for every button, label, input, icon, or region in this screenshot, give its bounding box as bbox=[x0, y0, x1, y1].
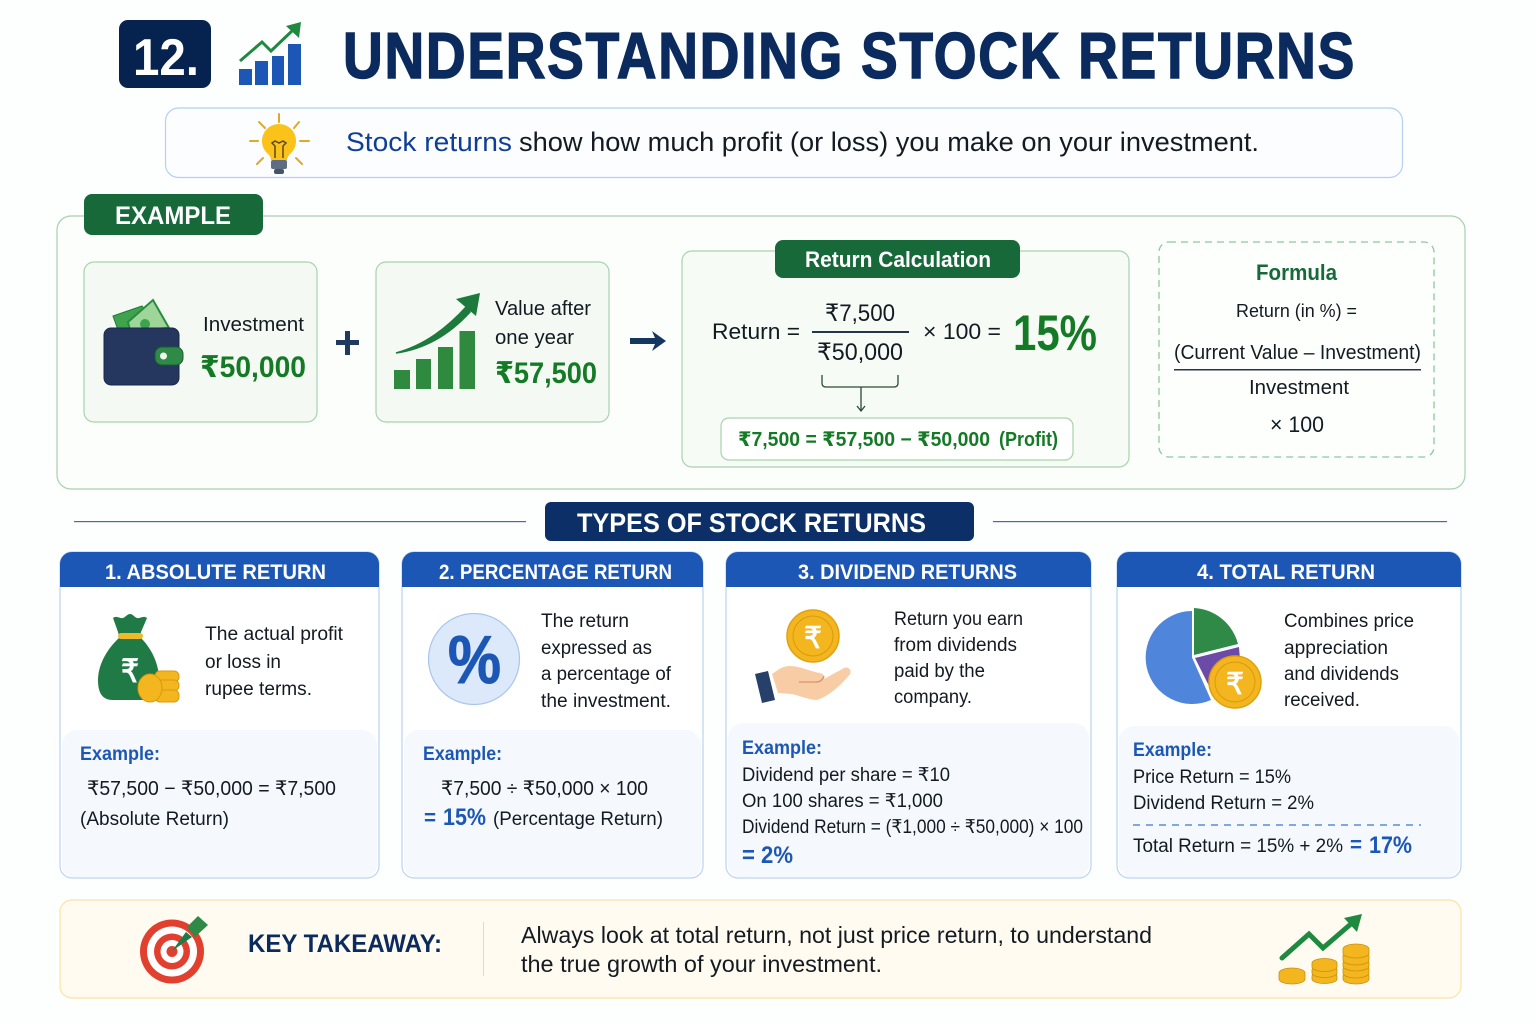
card header: 1. ABSOLUTE RETURN bbox=[105, 561, 326, 584]
description: a percentage of bbox=[541, 664, 672, 685]
description: Return you earn bbox=[894, 609, 1023, 630]
example block: 15% bbox=[443, 804, 486, 831]
panel: dividend returns bbox=[726, 552, 1091, 878]
calculation tab bbox=[775, 240, 1020, 278]
description: The actual profit bbox=[205, 624, 344, 645]
icon: rising bars with arrow bbox=[394, 293, 480, 389]
panel: percentage return bbox=[402, 552, 703, 878]
example block: Example: bbox=[80, 744, 160, 765]
example block: (Percentage Return) bbox=[493, 809, 663, 830]
example block: ₹57,500 − ₹50,000 = ₹7,500 bbox=[87, 778, 336, 800]
icon: plus sign bbox=[336, 331, 359, 355]
description: The return bbox=[541, 611, 629, 632]
description: the investment. bbox=[541, 691, 671, 712]
icon: pie chart with rupee coin bbox=[1146, 608, 1261, 708]
example block: Example: bbox=[1133, 740, 1212, 761]
section heading: types of stock returns: TYPES OF STOCK RETURNS bbox=[577, 508, 926, 538]
card header bbox=[726, 552, 1091, 587]
card header: 3. DIVIDEND RETURNS bbox=[798, 561, 1017, 584]
description: received. bbox=[1284, 690, 1360, 711]
example block: (Absolute Return) bbox=[80, 809, 229, 830]
panel: example bbox=[57, 194, 1465, 489]
definition banner: show how much profit (or loss) you make on your investment. bbox=[519, 127, 1259, 157]
number badge bbox=[119, 20, 211, 88]
value text: Value after bbox=[495, 298, 591, 320]
description: expressed as bbox=[541, 638, 652, 659]
calculation equation bbox=[712, 300, 1001, 366]
card: value after one year bbox=[376, 262, 609, 422]
card: formula: Investment bbox=[1249, 377, 1349, 399]
section heading: types of stock returns bbox=[74, 502, 1447, 541]
description bbox=[205, 624, 344, 700]
card header bbox=[402, 552, 703, 587]
value amount: ₹57,500 bbox=[495, 357, 597, 390]
example block: = 2% bbox=[742, 842, 793, 869]
banner text: Stock returns bbox=[346, 127, 512, 157]
icon: wallet with cash bbox=[104, 300, 183, 385]
card: formula: (Current Value – Investment) bbox=[1174, 342, 1421, 364]
description: Combines price bbox=[1284, 611, 1414, 632]
description: appreciation bbox=[1284, 638, 1388, 659]
description: paid by the bbox=[894, 661, 985, 682]
example block: On 100 shares = ₹1,000 bbox=[742, 791, 943, 812]
icon: coin stacks and growth arrow bbox=[1279, 914, 1369, 984]
example block: = bbox=[424, 805, 436, 830]
description: or loss in bbox=[205, 652, 281, 673]
investment text: Investment bbox=[203, 314, 304, 336]
icon: percent circle: % bbox=[448, 622, 501, 698]
example tab: EXAMPLE bbox=[115, 202, 231, 230]
card: formula: Formula bbox=[1256, 260, 1338, 285]
calculation equation: ₹50,000 bbox=[817, 339, 903, 366]
card header: 4. TOTAL RETURN bbox=[1197, 561, 1375, 584]
example block bbox=[404, 730, 701, 877]
example block: Dividend Return = 2% bbox=[1133, 793, 1314, 814]
card: value after one year: one year bbox=[495, 327, 574, 349]
icon: money bag with coins bbox=[98, 614, 179, 702]
arrow to return calculation bbox=[630, 331, 666, 351]
example block: Dividend per share = ₹10 bbox=[742, 765, 950, 786]
investment value: ₹50,000 bbox=[200, 351, 306, 384]
panel: total return bbox=[1117, 552, 1461, 878]
description: from dividends bbox=[894, 635, 1017, 656]
card: formula: × 100 bbox=[1270, 412, 1324, 437]
panel: key takeaway bbox=[60, 900, 1461, 998]
example block: Dividend Return = (₹1,000 ÷ ₹50,000) × 100 bbox=[742, 817, 1083, 838]
profit derivation box: (Profit) bbox=[999, 429, 1058, 451]
card: formula bbox=[1159, 242, 1434, 457]
example block bbox=[728, 723, 1089, 877]
example block bbox=[62, 730, 377, 877]
icon: growth bar chart bbox=[239, 22, 301, 85]
icon: money bag with coins: ₹ bbox=[121, 653, 139, 689]
icon: pie chart with rupee coin: ₹ bbox=[1226, 668, 1244, 701]
description: rupee terms. bbox=[205, 679, 312, 700]
description: company. bbox=[894, 687, 972, 708]
card: investment bbox=[84, 262, 317, 422]
description: and dividends bbox=[1284, 664, 1399, 685]
profit derivation box: ₹7,500 = ₹57,500 − ₹50,000 bbox=[738, 429, 990, 451]
example block: ₹7,500 ÷ ₹50,000 × 100 bbox=[441, 778, 648, 800]
card header bbox=[1117, 552, 1461, 587]
number badge: 12. bbox=[133, 29, 199, 87]
card: formula: Return (in %) = bbox=[1236, 301, 1357, 321]
example block bbox=[1119, 726, 1459, 877]
icon: light bulb bbox=[250, 114, 309, 174]
description bbox=[1284, 611, 1414, 711]
bracket and down arrow bbox=[822, 375, 898, 411]
takeaway text: the true growth of your investment. bbox=[521, 951, 882, 977]
description bbox=[541, 611, 672, 712]
takeaway text: Always look at total return, not just price return, to understand bbox=[521, 922, 1152, 948]
calculation equation: × 100 = bbox=[923, 319, 1001, 344]
takeaway label: KEY TAKEAWAY: bbox=[248, 930, 442, 958]
description bbox=[894, 609, 1023, 708]
example block: Example: bbox=[423, 744, 502, 765]
icon: hand holding rupee coin bbox=[755, 610, 851, 703]
icon: target with dart bbox=[140, 916, 208, 984]
calculation tab: Return Calculation bbox=[805, 247, 991, 272]
example block: Example: bbox=[742, 738, 822, 759]
card header: 2. PERCENTAGE RETURN bbox=[439, 561, 672, 584]
icon: hand holding rupee coin: ₹ bbox=[804, 622, 822, 655]
icon: percent circle bbox=[428, 614, 520, 704]
definition banner bbox=[166, 108, 1402, 178]
panel: absolute return bbox=[60, 552, 379, 878]
card header bbox=[60, 552, 379, 587]
profit derivation box bbox=[721, 418, 1073, 460]
calculation equation: ₹7,500 bbox=[825, 300, 895, 327]
result 15%: 15% bbox=[1013, 305, 1097, 361]
example block: Price Return = 15% bbox=[1133, 767, 1291, 788]
example block: = bbox=[1350, 832, 1362, 857]
header: number badge, icon and title bbox=[119, 19, 1356, 92]
example tab bbox=[84, 194, 263, 235]
example block: 17% bbox=[1369, 832, 1412, 859]
card: return calculation bbox=[682, 240, 1129, 467]
calculation equation: Return = bbox=[712, 319, 800, 344]
title: UNDERSTANDING STOCK RETURNS bbox=[343, 19, 1356, 92]
takeaway text bbox=[521, 922, 1152, 977]
example block: Total Return = 15% + 2% bbox=[1133, 836, 1343, 857]
